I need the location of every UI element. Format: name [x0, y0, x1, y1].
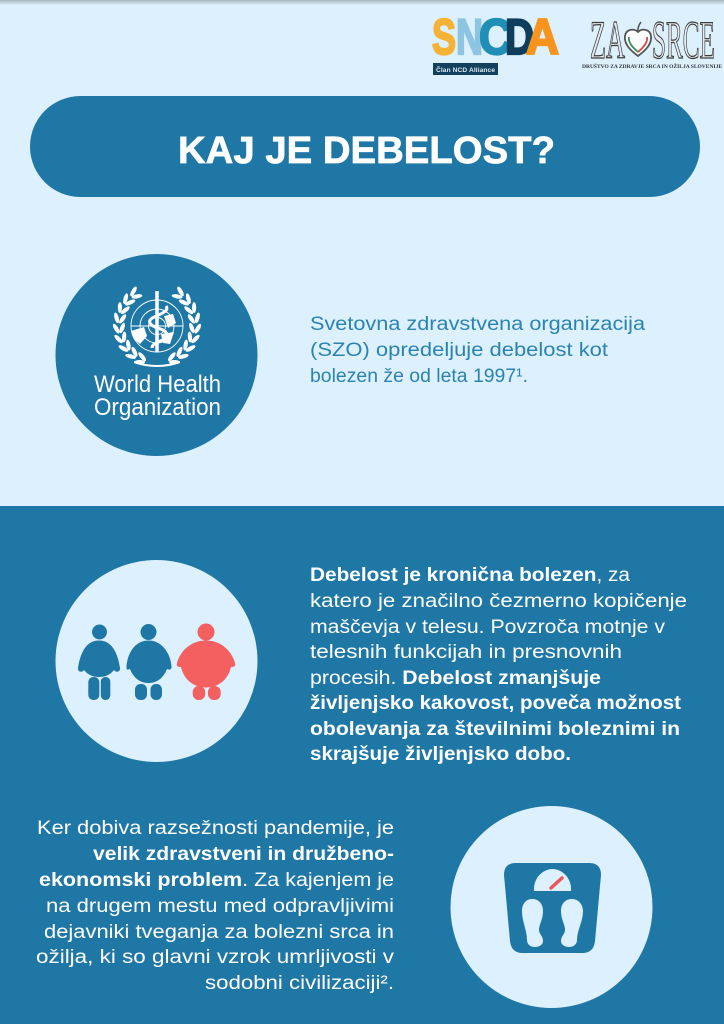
text block: chronic disease: skrajšuje življenjsko dobo. [310, 744, 571, 765]
text block: chronic disease: življenjsko kakovost, poveča možnost [310, 693, 682, 714]
continents [131, 314, 176, 344]
text block: WHO definition: (SZO) opredeljuje debelost kot [310, 340, 609, 361]
text block: pandemic: sodobni civilizaciji². [205, 973, 394, 994]
logo: SNCDA: D [505, 9, 534, 65]
text block: chronic disease: Debelost je kronična bolezen , za [310, 565, 630, 586]
text block: chronic disease: procesih. Debelost zmanjšuje [310, 668, 601, 689]
logo: SNCDA: S [432, 9, 456, 65]
logo: SNCDA: N [456, 9, 483, 65]
icon: bathroom scale [450, 806, 652, 1008]
logo: SNCDA: Član NCD Alliance [436, 65, 495, 74]
text block: pandemic [36, 818, 395, 994]
figure: overweight [78, 624, 120, 700]
icon: World Health Organization logo [56, 254, 258, 456]
text block: chronic disease [310, 565, 687, 765]
text block: chronic disease: telesnih funkcijah in presnovnih [310, 642, 622, 663]
text block: pandemic: dejavniki tveganja za bolezni srca in [44, 922, 394, 943]
text block: chronic disease: katero je značilno čezmerno kopičenje [310, 591, 687, 612]
icon: three body figures [56, 560, 258, 762]
text block: pandemic: ekonomski problem . Za kajenjem je [39, 870, 394, 891]
title: KAJ JE DEBELOST? [178, 130, 555, 172]
logo: SNCDA: C [479, 9, 512, 65]
figure: severely obese (red) [177, 624, 235, 700]
logo: Za srce [582, 10, 722, 70]
figure: obese [126, 624, 172, 700]
text block: WHO definition: bolezen že od leta 1997¹. [310, 366, 528, 387]
panel: dark blue section [0, 506, 724, 1024]
text block: WHO definition: Svetovna zdravstvena organizacija [310, 314, 645, 335]
logo: SNCDA: A [526, 9, 559, 65]
icon: World Health Organization logo: Organization [94, 394, 221, 421]
logo: Za srce: DRUŠTVO ZA ZDRAVJE SRCA IN OŽILJA SLOVENIJE [582, 62, 722, 70]
right laurel branch [167, 286, 202, 364]
text block: pandemic: Ker dobiva razsežnosti pandemije, je [37, 818, 394, 839]
text block: chronic disease: obolevanja za številnimi boleznimi in [310, 719, 680, 740]
left laurel branch [112, 286, 147, 364]
text block: pandemic: ožilja, ki so glavni vzrok umrljivosti v [36, 947, 395, 968]
logo: SNCDA [432, 9, 559, 75]
logo: Za srce: ZA [590, 10, 625, 70]
icon: World Health Organization logo: World Health [94, 371, 221, 398]
text block: WHO definition [310, 314, 645, 387]
text block: pandemic: na drugem mestu med odpravljivimi [46, 896, 394, 917]
title banner [30, 96, 700, 197]
text block: pandemic: velik zdravstveni in družbeno- [93, 844, 394, 865]
text block: chronic disease: maščevja v telesu. Povzroča motnje v [310, 617, 666, 638]
